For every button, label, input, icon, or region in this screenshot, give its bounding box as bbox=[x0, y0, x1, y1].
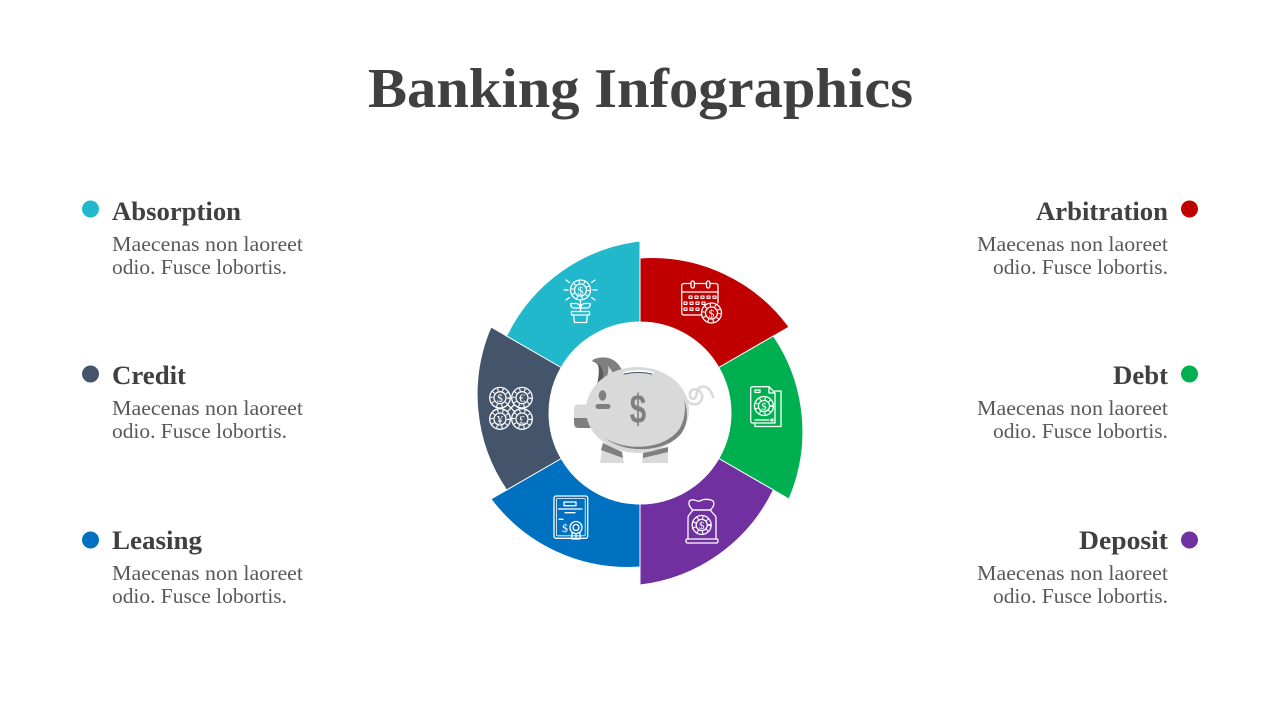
marker dot: Leasing bbox=[82, 532, 99, 548]
pig ear bbox=[592, 357, 622, 385]
icon: four currency coins: $ bbox=[497, 391, 503, 405]
pig body bbox=[586, 367, 689, 453]
coin slot bbox=[624, 371, 653, 374]
panel: Absorption bbox=[82, 197, 303, 279]
text block: Debt bbox=[977, 396, 1168, 443]
panel: Deposit bbox=[977, 526, 1198, 608]
segment: Credit bbox=[477, 327, 561, 490]
icon: document with coin bbox=[751, 387, 781, 426]
segment: Debt bbox=[719, 336, 803, 499]
icon: money bag: $ bbox=[699, 520, 705, 532]
text block: Leasing: Maecenas non laoreet bbox=[112, 561, 303, 585]
icon: certificate bbox=[554, 496, 588, 539]
text block: Leasing bbox=[112, 561, 303, 608]
text block: Arbitration: Maecenas non laoreet bbox=[977, 232, 1168, 256]
heading: Arbitration: Arbitration bbox=[1036, 197, 1169, 226]
icon: document with coin: $ bbox=[761, 401, 767, 413]
icon: money bag bbox=[686, 499, 718, 543]
text block: Debt: odio. Fusce lobortis. bbox=[993, 419, 1168, 443]
heading: Credit: Credit bbox=[112, 361, 186, 390]
icon: certificate: $ bbox=[562, 521, 568, 535]
text block: Arbitration: odio. Fusce lobortis. bbox=[993, 255, 1168, 279]
segment: Deposit bbox=[640, 458, 773, 585]
chart: ring of six segments bbox=[477, 241, 803, 585]
segment: Leasing bbox=[491, 458, 640, 567]
heading: Absorption: Absorption bbox=[112, 197, 242, 226]
marker dot: Credit bbox=[82, 366, 99, 382]
text block: Deposit bbox=[977, 561, 1168, 608]
pig tail bbox=[684, 387, 713, 404]
marker dot: Absorption bbox=[82, 200, 99, 218]
text block: Credit: odio. Fusce lobortis. bbox=[112, 419, 287, 443]
panel: Debt bbox=[977, 361, 1198, 443]
icon: four currency coins bbox=[490, 387, 532, 429]
icon: calendar with coin bbox=[682, 281, 722, 323]
marker dot: Debt bbox=[1181, 366, 1198, 382]
pig snout bbox=[574, 404, 600, 428]
icon: money plant bbox=[564, 280, 597, 322]
icon: four currency coins: ¥ bbox=[497, 412, 503, 426]
text block: Absorption: Maecenas non laoreet bbox=[112, 232, 303, 256]
text block: Arbitration bbox=[977, 232, 1168, 279]
heading: Leasing: Leasing bbox=[112, 526, 202, 555]
pig eye bbox=[599, 390, 606, 401]
icon: four currency coins: £ bbox=[519, 412, 525, 426]
text block: Absorption: odio. Fusce lobortis. bbox=[112, 255, 287, 279]
heading: Deposit: Deposit bbox=[1079, 526, 1168, 555]
icon: calendar with coin: $ bbox=[708, 306, 714, 320]
icon: piggy bank bbox=[574, 357, 713, 463]
title: Banking Infographics bbox=[368, 58, 913, 120]
text block: Deposit: Maecenas non laoreet bbox=[977, 561, 1168, 585]
dollar sign: $ bbox=[630, 386, 646, 432]
segment: Absorption bbox=[507, 241, 640, 368]
pig mouth bbox=[596, 404, 610, 409]
icon: money plant: $ bbox=[578, 284, 584, 298]
text block: Credit bbox=[112, 396, 303, 443]
pig legs bbox=[600, 443, 668, 463]
text block: Leasing: odio. Fusce lobortis. bbox=[112, 584, 287, 608]
text block: Debt: Maecenas non laoreet bbox=[977, 396, 1168, 420]
text block: Deposit: odio. Fusce lobortis. bbox=[993, 584, 1168, 608]
heading: Debt: Debt bbox=[1113, 361, 1168, 390]
text block: Absorption bbox=[112, 232, 303, 279]
marker dot: Deposit bbox=[1181, 532, 1198, 548]
panel: Arbitration bbox=[977, 197, 1198, 279]
text block: Credit: Maecenas non laoreet bbox=[112, 396, 303, 420]
marker dot: Arbitration bbox=[1181, 200, 1198, 218]
panel: Credit bbox=[82, 361, 303, 443]
panel: Leasing bbox=[82, 526, 303, 608]
icon: four currency coins: € bbox=[519, 391, 525, 405]
segment: Arbitration bbox=[640, 258, 789, 368]
